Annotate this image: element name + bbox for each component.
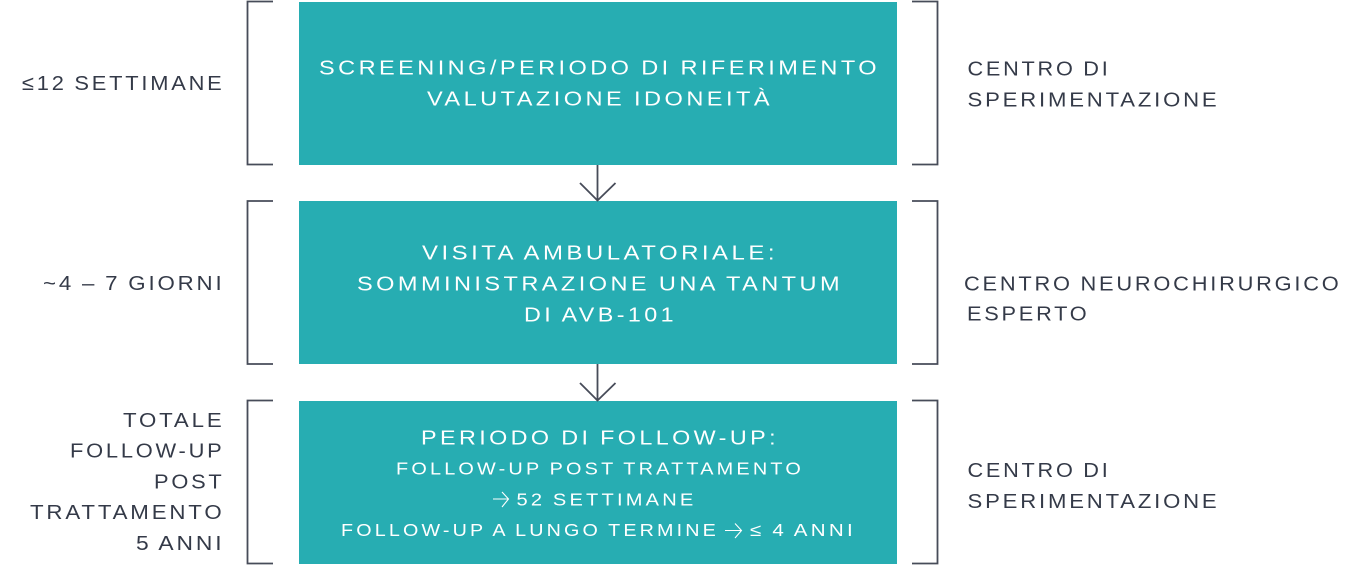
step 1 box	[299, 2, 897, 165]
step 2 text: SOMMINISTRAZIONE UNA TANTUM	[357, 272, 843, 296]
duration label: 4-7 days: ~4 – 7 GIORNI	[43, 272, 224, 295]
duration label: total follow-up	[30, 409, 225, 555]
step 3 text: 52 SETTIMANE	[516, 490, 696, 510]
location label: neurosurgical centre	[964, 272, 1342, 326]
panel: step 3 follow-up	[299, 401, 897, 564]
step 1 text: SCREENING/PERIODO DI RIFERIMENTO	[319, 56, 880, 80]
icon: small arrow before 4 years	[725, 524, 742, 538]
right bracket 1	[912, 2, 938, 164]
location label: neurosurgical centre: CENTRO NEUROCHIRURGICO	[964, 272, 1342, 296]
step 3 text: FOLLOW-UP A LUNGO TERMINE	[341, 520, 719, 540]
step 2 text	[357, 242, 843, 326]
arrow: step 2 to step 3	[580, 364, 616, 401]
location label: trial centre 2	[968, 459, 1220, 513]
arrow: step 1 to step 2	[580, 165, 616, 201]
location label: trial centre 2: CENTRO DI	[968, 459, 1110, 482]
step 2 text: VISITA AMBULATORIALE:	[422, 242, 778, 264]
left bracket 3	[248, 400, 273, 564]
duration label: total follow-up: TOTALE	[123, 409, 224, 432]
duration label: total follow-up: FOLLOW-UP	[70, 440, 224, 462]
location label: trial centre 1: CENTRO DI	[968, 58, 1110, 80]
step 3 text: PERIODO DI FOLLOW-UP:	[421, 426, 779, 450]
duration label: total follow-up: TRATTAMENTO	[30, 501, 225, 524]
icon: small arrow before 52 weeks	[493, 492, 508, 507]
step 3 text	[341, 426, 856, 540]
right bracket 2	[912, 201, 938, 364]
step 3 text: ≤ 4 ANNI	[750, 520, 856, 540]
step 1 text: VALUTAZIONE IDONEITÀ	[427, 88, 773, 110]
step 2 box	[299, 201, 897, 364]
panel: step 1 screening	[299, 2, 897, 165]
left bracket 2	[248, 201, 273, 364]
step 3 text: FOLLOW-UP POST TRATTAMENTO	[396, 458, 804, 478]
duration label: 12 weeks: ≤12 SETTIMANE	[22, 72, 224, 95]
step 2 text: DI AVB-101	[524, 304, 677, 326]
duration label: total follow-up: POST	[154, 470, 224, 494]
panel: step 2 visit	[299, 201, 897, 364]
location label: trial centre 1	[968, 58, 1220, 112]
location label: neurosurgical centre: ESPERTO	[967, 302, 1090, 326]
right bracket 3	[912, 400, 938, 564]
step 3 box	[299, 401, 897, 564]
location label: trial centre 2: SPERIMENTAZIONE	[968, 490, 1220, 513]
location label: trial centre 1: SPERIMENTAZIONE	[968, 88, 1220, 112]
left bracket 1	[248, 2, 273, 164]
step 1 text	[319, 56, 880, 110]
duration label: total follow-up: 5 ANNI	[136, 532, 224, 555]
